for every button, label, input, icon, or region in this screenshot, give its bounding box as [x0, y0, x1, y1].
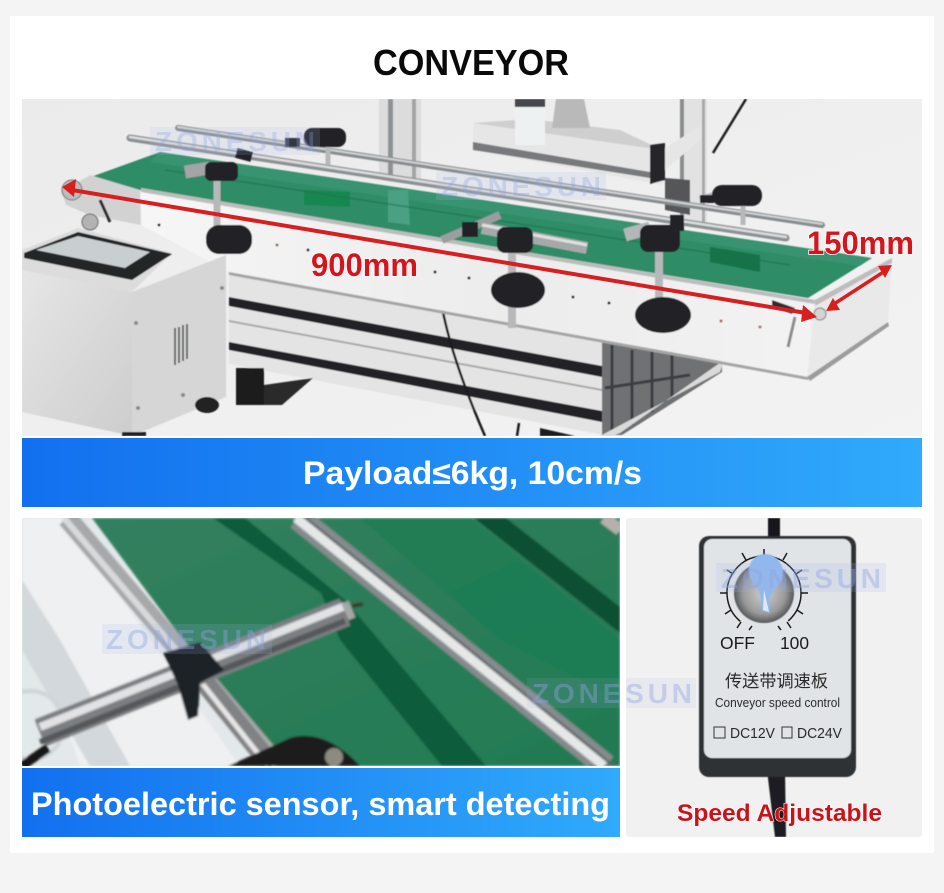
aluminium frame profile [229, 268, 724, 436]
white frame [0, 518, 240, 766]
payload banner: Payload≤6kg, 10cm/s [303, 455, 642, 491]
watermark [527, 678, 620, 708]
controller body [699, 536, 856, 777]
dial labels [720, 637, 808, 649]
panel: sensor photo [22, 518, 620, 766]
control box [22, 228, 226, 436]
cable [442, 310, 521, 436]
dial labels: OFF [720, 633, 755, 653]
screw [325, 748, 343, 766]
controller label text: 传送带调速板 [725, 672, 828, 691]
controller label text [714, 672, 842, 742]
support posts [217, 145, 743, 328]
black knob [228, 736, 360, 766]
speed dial [720, 549, 808, 630]
panel: speed controller photo [626, 518, 922, 837]
sensor banner [22, 768, 620, 837]
watermark: ZONESUN [721, 563, 881, 594]
controller label text: Conveyor speed control [715, 695, 840, 710]
panel: conveyor photo [22, 99, 922, 436]
watermark: ZONESUN [106, 624, 266, 655]
guide rails [130, 127, 822, 238]
sensor bar and tubes [185, 168, 730, 248]
silver guide rail [296, 518, 620, 766]
speed adjustable caption: Speed Adjustable [677, 800, 882, 827]
watermark: ZONESUN [532, 678, 692, 709]
watermark: ZONESUN [441, 171, 601, 202]
watermark: ZONESUN [532, 678, 692, 709]
payload banner [22, 438, 922, 507]
black clamps [205, 128, 762, 333]
side plate [62, 175, 892, 381]
title: CONVEYOR [373, 42, 569, 83]
red arrow: 900mm [62, 179, 817, 322]
label: 150mm: 150mm [807, 225, 914, 261]
machine uprights and upper bracket [379, 99, 746, 224]
black bracket [163, 642, 224, 720]
photoelectric sensor [22, 604, 363, 766]
controller label text: DC12V [730, 726, 775, 742]
controller cables [767, 518, 786, 837]
sensor banner: Photoelectric sensor, smart detecting [31, 786, 610, 822]
watermark [626, 678, 696, 708]
belt edge rail [64, 518, 278, 766]
dial labels: 100 [780, 633, 809, 653]
watermark: ZONESUN [155, 126, 315, 157]
green belt [92, 518, 620, 766]
red arrow: 150mm [826, 265, 892, 311]
label: 900mm: 900mm [311, 247, 418, 283]
green conveyor belt [88, 152, 872, 298]
controller label text: DC24V [797, 726, 842, 742]
